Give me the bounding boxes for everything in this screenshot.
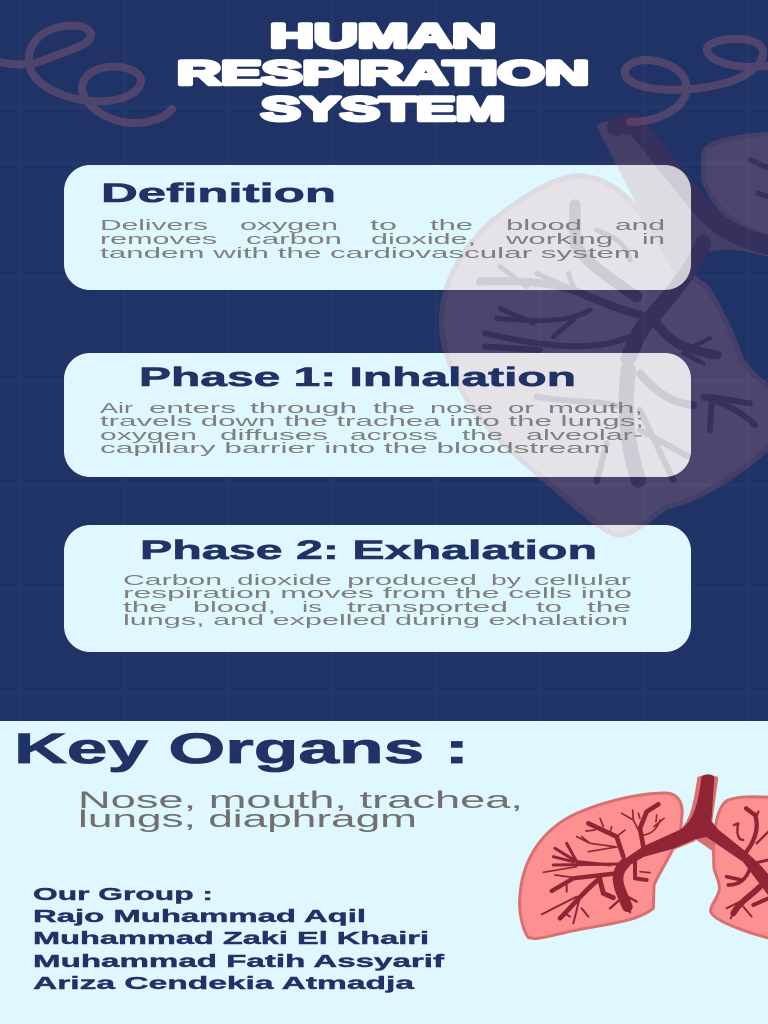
text block: phase 2 body: cellular: [534, 572, 631, 589]
text block: key organs list: lungs, diaphragm: [78, 806, 417, 833]
text block: phase 1 body: Air: [100, 400, 133, 417]
text block: group members: Rajo Muhammad Aqil: [33, 906, 366, 926]
text block: phase 2 body: to: [536, 599, 562, 616]
icon: left decorative swirl: [0, 25, 172, 123]
text block: definition body: tandem with the cardiovascular system: [100, 245, 640, 262]
text block: phase 1 body: travels down the trachea into the lungs;: [100, 413, 644, 430]
heading: key organs: Key Organs :: [14, 725, 469, 773]
heading: definition: Definition: [101, 178, 336, 208]
heading: phase 1: Phase 1: Inhalation: [139, 362, 576, 392]
panel: key organs background: [0, 721, 768, 1024]
title: [177, 18, 589, 128]
text block: phase 1 body: [100, 400, 644, 457]
text block: phase 2 body: the: [587, 599, 631, 616]
text block: phase 2 body: the: [123, 599, 167, 616]
text block: phase 1 body: nose: [430, 400, 493, 417]
text block: definition body: to: [370, 217, 397, 234]
text block: group members: Our Group :: [33, 884, 213, 904]
text block: phase 1 body: across: [350, 427, 438, 444]
text block: phase 1 body: alveolar-: [526, 427, 643, 444]
text block: phase 2 body: Carbon: [123, 572, 222, 589]
text block: definition body: [100, 217, 665, 262]
text block: group members: Muhammad Zaki El Khairi: [33, 928, 429, 948]
icon: right decorative swirl: [625, 39, 768, 122]
text block: phase 1 body: or: [508, 400, 534, 417]
title: RESPIRATION: [177, 54, 589, 92]
text block: definition body: removes: [100, 231, 217, 248]
text block: phase 1 body: capillary barrier into the bloodstream: [100, 440, 610, 457]
text block: phase 2 body: is: [302, 599, 322, 616]
title: SYSTEM: [261, 90, 505, 128]
icon: lungs illustration: [520, 775, 768, 939]
text block: phase 1 body: diffuses: [220, 427, 328, 444]
text block: phase 2 body: respiration moves from the cells into: [123, 585, 632, 602]
text block: phase 1 body: through: [250, 400, 357, 417]
text block: phase 2 body: [123, 572, 632, 629]
text block: phase 1 body: mouth,: [548, 400, 643, 417]
text block: key organs list: [78, 787, 523, 833]
text block: definition body: working: [504, 231, 613, 248]
text block: definition body: the: [430, 217, 473, 234]
text block: key organs list: Nose, mouth, trachea,: [78, 787, 523, 814]
text block: definition body: Delivers: [100, 217, 208, 234]
card: phase 1 background: [64, 353, 691, 477]
text block: definition body: and: [615, 217, 665, 234]
text block: definition body: blood: [506, 217, 582, 234]
text block: definition body: dioxide,: [371, 231, 476, 248]
text block: phase 1 body: oxygen: [100, 427, 197, 444]
text block: phase 2 body: by: [491, 572, 522, 589]
text block: group members: [33, 884, 444, 993]
text block: definition body: oxygen: [240, 217, 338, 234]
card: phase 2 background: [64, 525, 691, 652]
text block: phase 2 body: produced: [347, 572, 477, 589]
text block: phase 1 body: enters: [149, 400, 236, 417]
text block: group members: Ariza Cendekia Atmadja: [33, 973, 414, 993]
text block: group members: Muhammad Fatih Assyarif: [33, 951, 444, 971]
card: definition background: [64, 165, 691, 290]
text block: phase 2 body: dioxide: [237, 572, 332, 589]
text block: definition body: carbon: [246, 231, 342, 248]
text block: definition body: in: [642, 231, 665, 248]
title: HUMAN: [270, 18, 496, 56]
text block: phase 2 body: blood,: [193, 599, 276, 616]
heading: phase 2: Phase 2: Exhalation: [140, 535, 597, 565]
text block: phase 2 body: transported: [347, 599, 508, 616]
text block: phase 1 body: the: [462, 427, 503, 444]
icon: large translucent lungs: [441, 120, 768, 535]
text block: phase 2 body: lungs, and expelled during exhalation: [123, 612, 628, 629]
text block: phase 1 body: the: [373, 400, 415, 417]
